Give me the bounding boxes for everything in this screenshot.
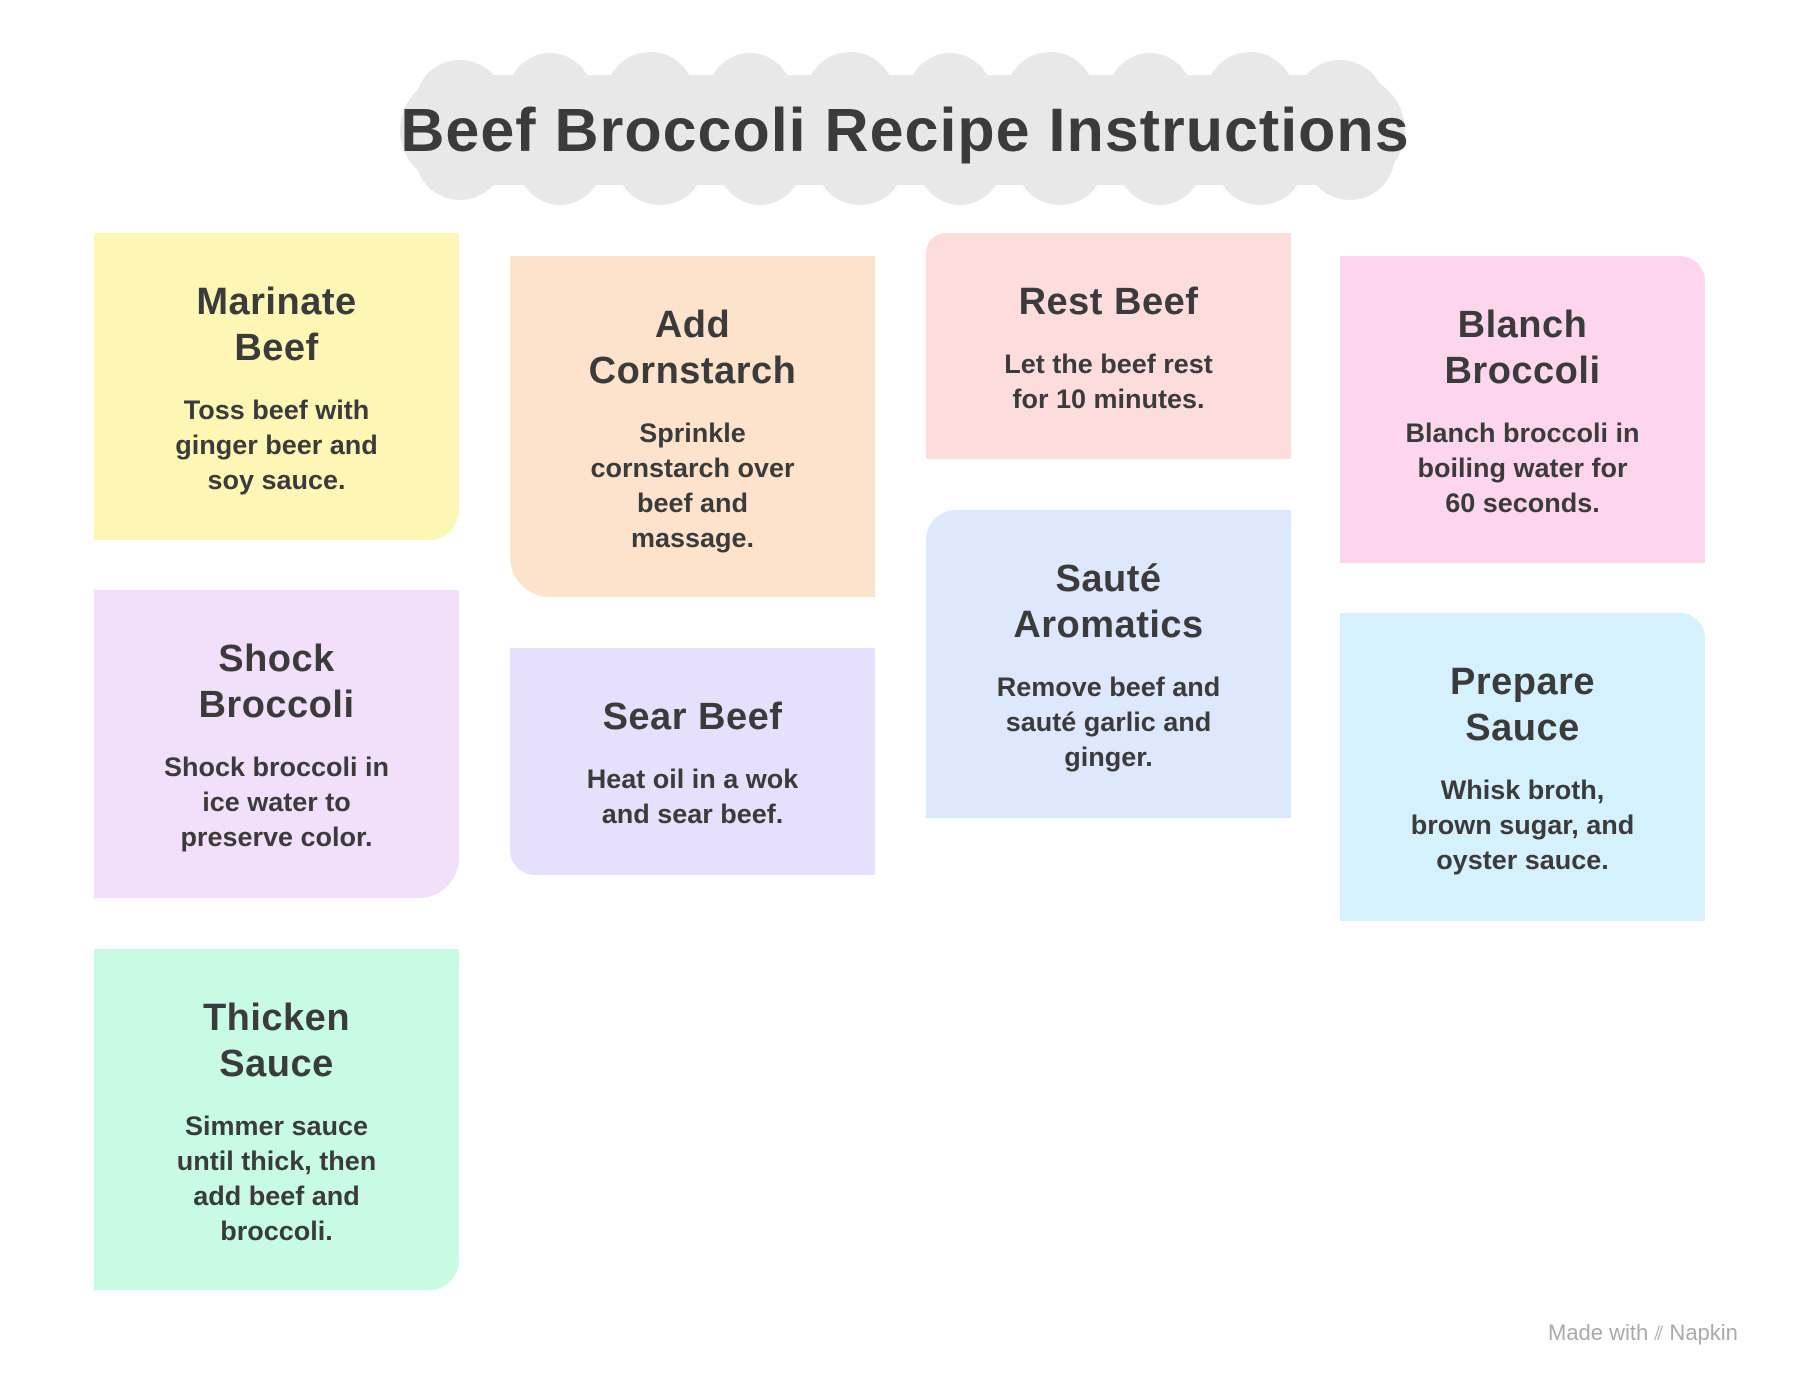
card: marinate beef — [94, 233, 459, 540]
card: thicken sauce: Sauce — [219, 1043, 334, 1085]
card: add cornstarch: Add — [655, 304, 730, 346]
card: rest beef: Rest Beef — [1019, 281, 1198, 323]
card: marinate beef: Toss beef with — [184, 395, 369, 425]
title: Beef Broccoli Recipe Instructions — [400, 96, 1410, 164]
card: saute aromatics: Sauté — [1056, 558, 1161, 600]
card: shock broccoli: Shock broccoli in — [164, 752, 389, 782]
card: sear beef: Heat oil in a wok — [587, 764, 798, 794]
card: prepare sauce: Sauce — [1465, 707, 1580, 749]
card: thicken sauce: Simmer sauce — [185, 1111, 368, 1141]
card: blanch broccoli: Blanch broccoli in — [1405, 418, 1640, 448]
card: blanch broccoli: boiling water for — [1417, 453, 1628, 483]
card: blanch broccoli: Blanch — [1458, 304, 1587, 346]
card: saute aromatics — [926, 510, 1291, 818]
card: rest beef: Let the beef rest — [1004, 349, 1213, 379]
card: add cornstarch: beef and — [637, 488, 748, 518]
card: shock broccoli: Broccoli — [198, 684, 355, 726]
card: thicken sauce: add beef and — [193, 1181, 360, 1211]
card: marinate beef: soy sauce. — [207, 465, 346, 495]
card: shock broccoli: Shock — [218, 638, 335, 680]
card: thicken sauce: broccoli. — [220, 1216, 333, 1246]
card: add cornstarch: Sprinkle — [639, 418, 746, 448]
card: prepare sauce: brown sugar, and — [1411, 810, 1634, 840]
card: shock broccoli: ice water to — [202, 787, 351, 817]
card: add cornstarch: cornstarch over — [590, 453, 795, 483]
card: shock broccoli: preserve color. — [180, 822, 373, 852]
card: saute aromatics: Aromatics — [1013, 604, 1204, 646]
card: rest beef: for 10 minutes. — [1012, 384, 1205, 414]
card: prepare sauce: oyster sauce. — [1436, 845, 1609, 875]
card: saute aromatics: sauté garlic and — [1006, 707, 1211, 737]
card: marinate beef: Beef — [234, 327, 319, 369]
card: prepare sauce: Prepare — [1450, 661, 1595, 703]
footer: made with napkin: Made with ⫽ Napkin — [1548, 1320, 1738, 1345]
card: saute aromatics: ginger. — [1064, 742, 1153, 772]
title cloud — [400, 52, 1405, 205]
card: sear beef: and sear beef. — [602, 799, 783, 829]
card: thicken sauce: until thick, then — [177, 1146, 376, 1176]
card: thicken sauce — [94, 949, 459, 1290]
card: marinate beef: Marinate — [196, 281, 357, 323]
card: prepare sauce — [1340, 613, 1705, 921]
card: sear beef: Sear Beef — [603, 696, 782, 738]
card: shock broccoli — [94, 590, 459, 898]
card: thicken sauce: Thicken — [203, 997, 350, 1039]
card: rest beef — [926, 233, 1291, 459]
card: saute aromatics: Remove beef and — [997, 672, 1220, 702]
card: add cornstarch — [510, 256, 875, 597]
card: blanch broccoli — [1340, 256, 1705, 563]
card: sear beef — [510, 648, 875, 875]
card: add cornstarch: massage. — [631, 523, 754, 553]
card: blanch broccoli: Broccoli — [1444, 350, 1601, 392]
card: blanch broccoli: 60 seconds. — [1445, 488, 1600, 518]
card: marinate beef: ginger beer and — [175, 430, 378, 460]
card: add cornstarch: Cornstarch — [589, 350, 796, 392]
card: prepare sauce: Whisk broth, — [1441, 775, 1604, 805]
